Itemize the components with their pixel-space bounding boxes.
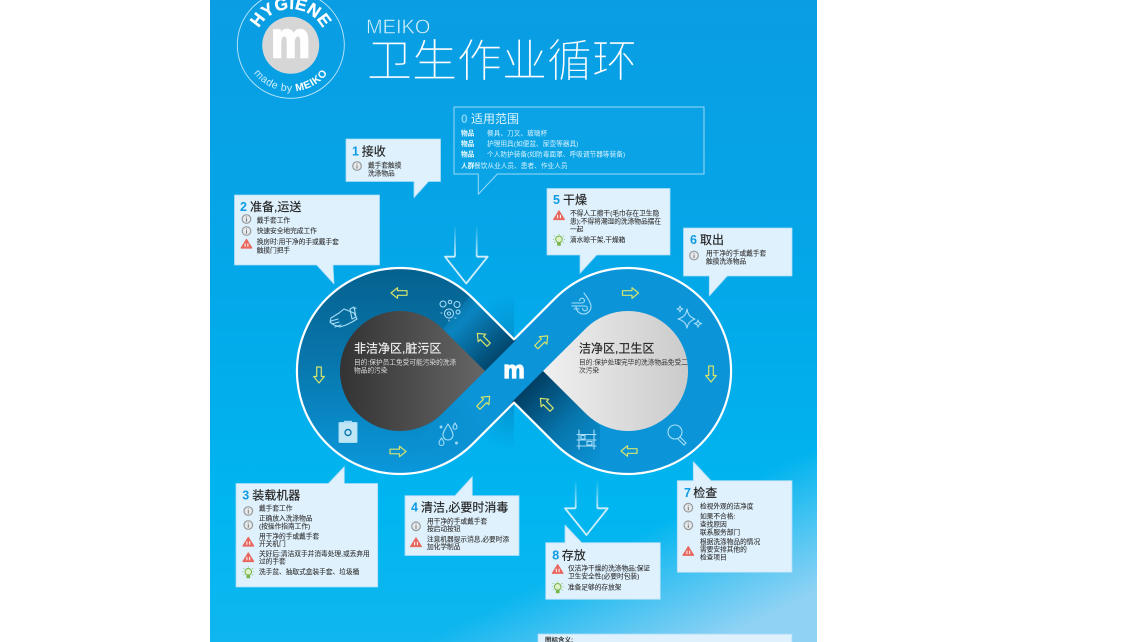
callout 7: inspect: 联系服务部门: [700, 527, 740, 536]
dirty zone teardrop: 非洁净区,脏污区: [354, 340, 441, 356]
callout 8: store: [546, 525, 660, 599]
callout 1: receive: [346, 139, 440, 198]
callout 6: unload: [684, 228, 792, 296]
clean zone teardrop: 洁净区,卫生区: [579, 342, 654, 356]
callout 7: inspect: [677, 462, 792, 572]
legend panel (cropped): [538, 634, 792, 642]
callout 0: scope: 物品: [461, 128, 475, 137]
title: 卫生作业循环: [367, 36, 637, 86]
callout 5: dry: 一起: [570, 225, 584, 233]
icon: glove: [330, 307, 357, 327]
callout 5: dry: 干燥: [563, 193, 587, 207]
callout 0: scope: 个人防护装备(如防毒面罩、呼吸调节器等装备): [487, 149, 625, 158]
infographic canvas: [210, 0, 817, 642]
callout 0: scope: 餐饮从业人员、患者、作业人员: [474, 161, 568, 170]
callout 2: prepare and transport: 准备,运送: [250, 199, 301, 214]
icon: magnifier: [668, 425, 686, 445]
icon: water drops: [439, 423, 457, 446]
infinity cycle diagram: [296, 266, 732, 476]
callout 2: prepare and transport: 2: [240, 200, 247, 214]
flow arrows: [314, 288, 716, 457]
callout 5: dry: 滴水晾干架,干燥箱: [570, 235, 626, 244]
dirty zone teardrop: 物品的污染: [354, 365, 388, 374]
callout 0: scope: 人群: [461, 161, 475, 170]
callout 2: prepare and transport: 换房时:用干净的手或戴手套: [257, 237, 339, 246]
callout 1: receive: 洗涤物品: [368, 168, 395, 177]
callout 3: load machine: (按操作指南工作): [259, 522, 310, 531]
clean zone teardrop: 目的:保护处理完毕的洗涤物品免受二: [579, 357, 688, 366]
callout 6: unload: 触摸洗涤物品: [706, 256, 746, 265]
logo: hygiene made by MEIKO: [236, 0, 345, 99]
callout 4: clean and disinfect: 4: [411, 501, 418, 515]
clean zone teardrop: 次污染: [579, 365, 599, 374]
callout 1: receive: 戴手套触摸: [368, 160, 402, 169]
callout 5: dry: 不得人工擦干(毛巾存在卫生隐: [570, 209, 659, 218]
callout 4: clean and disinfect: 用干净的手或戴手套: [427, 516, 487, 525]
callout 0: scope: 物品: [461, 149, 475, 158]
callout 0: scope: 适用范围: [471, 112, 519, 126]
callout 0: scope: 餐具、刀叉、玻璃杯: [487, 128, 547, 137]
callout 5: dry: 患);不得将潮湿的洗涤物品摆在: [570, 216, 661, 225]
callout 3: load machine: 过的手套: [259, 557, 286, 566]
callout 1: receive: 接收: [362, 143, 386, 158]
callout 4: clean and disinfect: 清洁,必要时消毒: [421, 501, 508, 515]
callout 2: prepare and transport: [234, 195, 380, 284]
callout 6: unload: 用干净的手或戴手套: [706, 248, 766, 257]
arrow: out of the cycle: [565, 480, 608, 535]
callout 7: inspect: 如果不合格:: [700, 512, 735, 521]
callout 4: clean and disinfect: 加化学制品: [427, 542, 461, 551]
callout 3: load machine: 开关机门: [259, 539, 286, 548]
callout 3: load machine: 正确放入洗涤物品: [259, 513, 313, 522]
callout 0: scope: [454, 107, 704, 194]
title: MEIKO: [366, 16, 430, 38]
clean zone teardrop: [543, 311, 688, 431]
callout 8: store: 存放: [562, 547, 586, 562]
callout 0: scope: 0: [461, 112, 468, 126]
callout 8: store: 卫生安全性(必要时包装): [568, 572, 639, 581]
callout 7: inspect: 查找原因: [700, 520, 727, 529]
callout 2: prepare and transport: 触摸门把手: [257, 245, 290, 254]
callout 7: inspect: 检查项目: [700, 552, 727, 561]
callout 3: load machine: 戴手套工作: [259, 504, 293, 513]
callout 3: load machine: 3: [242, 488, 249, 502]
callout 6: unload: 取出: [700, 233, 724, 247]
callout 0: scope: 物品: [461, 139, 475, 148]
callout 7: inspect: 根据洗涤物品的情况: [700, 537, 760, 546]
callout 7: inspect: 需要安排其他的: [700, 545, 747, 554]
callout 3: load machine: 用干净的手或戴手套: [259, 531, 319, 540]
callout 2: prepare and transport: 快速安全地完成工作: [257, 226, 317, 235]
icon: storage rack: [577, 430, 596, 449]
callout 7: inspect: 7: [684, 486, 691, 500]
callout 3: load machine: 关好后:清洁双手并消毒处理,或丢弃用: [259, 549, 370, 558]
callout 4: clean and disinfect: 注意机器提示消息,必要时添: [427, 534, 509, 543]
icon: sparkle: [677, 306, 702, 328]
blue poster background: [210, 0, 817, 642]
callout 6: unload: 6: [690, 233, 697, 247]
callout 3: load machine: 装载机器: [252, 488, 300, 502]
callout 1: receive: 1: [352, 144, 359, 158]
icon: chemical canister: [339, 421, 357, 442]
arrow: into the cycle: [445, 225, 488, 284]
logo: hygiene made by MEIKO: made by MEIKO: [254, 70, 326, 94]
callout 3: load machine: [236, 467, 378, 587]
callout 7: inspect: 检查: [693, 485, 717, 500]
callout 8: store: 准备足够的存放架: [568, 583, 622, 592]
callout 5: dry: [547, 188, 670, 273]
callout 3: load machine: 洗手盆、抽取式盒装手套、垃圾桶: [259, 567, 360, 576]
callout 7: inspect: 检视外观的洁净度: [700, 502, 754, 511]
callout 0: scope: 护理用具(如便盆、尿壶等器具): [487, 139, 578, 148]
callout 2: prepare and transport: 戴手套工作: [257, 215, 290, 224]
logo: hygiene made by MEIKO: m: [271, 12, 310, 67]
callout 8: store: 仅洁净干燥的洗涤物品;保证: [568, 564, 650, 573]
callout 4: clean and disinfect: [405, 477, 519, 556]
dirty zone teardrop: [340, 311, 485, 431]
icon: germs: [440, 300, 460, 321]
center m logo: m: [503, 357, 525, 384]
callout 8: store: 8: [552, 548, 559, 562]
icon: drying drop with wind: [572, 293, 591, 314]
callout 4: clean and disinfect: 按启动按钮: [427, 524, 461, 533]
callout 5: dry: 5: [553, 193, 560, 207]
dirty zone teardrop: 目的:保护员工免受可能污染的洗涤: [354, 357, 456, 366]
